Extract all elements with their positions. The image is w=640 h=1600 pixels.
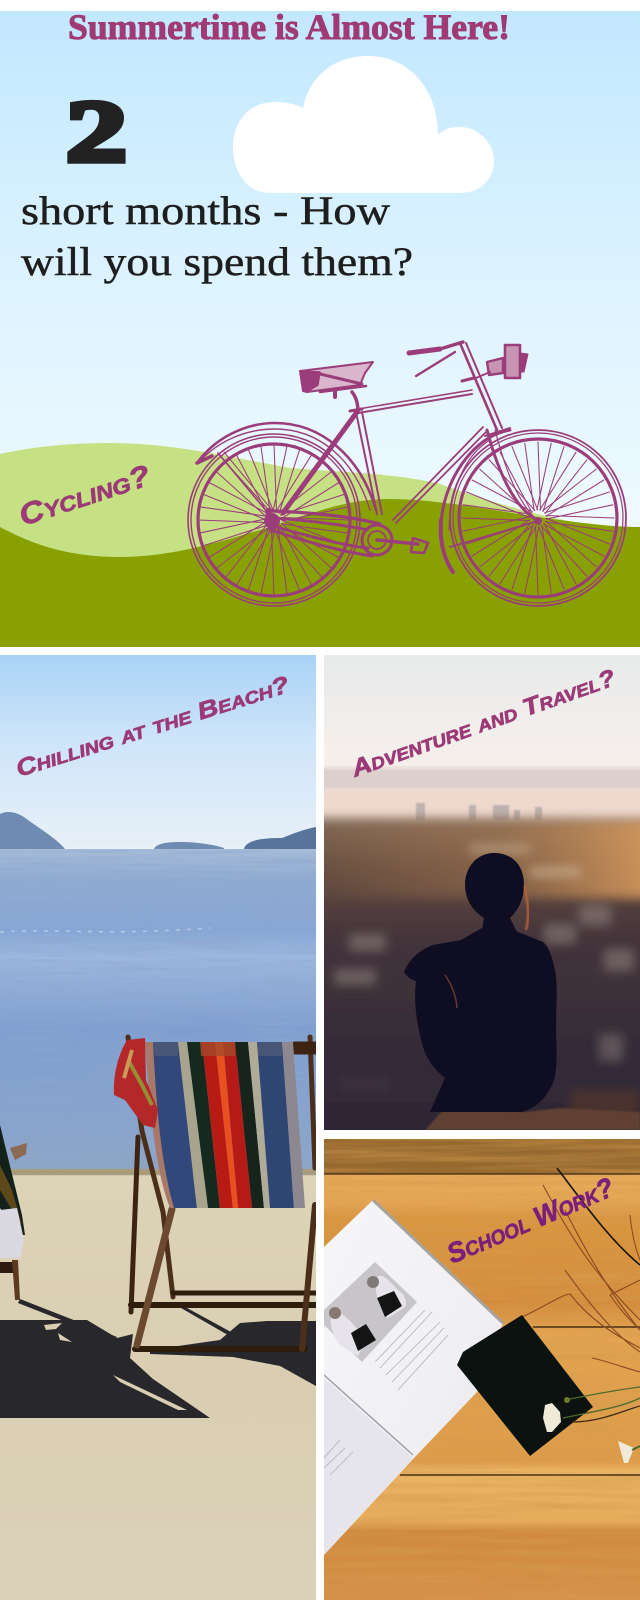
dark top plank	[324, 1139, 640, 1174]
handlebar	[409, 342, 463, 376]
left deck chair	[0, 1125, 27, 1300]
panel: hero sky and hills	[0, 7, 640, 647]
label: chilling at the beach: Chilling at the Beach?	[13, 671, 293, 783]
blurred city lights	[335, 845, 640, 1115]
portrait photos	[324, 1262, 417, 1362]
sky background	[0, 11, 640, 531]
subtitle line 2: will you spend them?	[21, 239, 413, 284]
beach sky	[0, 655, 316, 850]
label: school work: School Work?	[442, 1171, 618, 1270]
black notebook	[457, 1315, 593, 1456]
wet shoreline	[0, 1169, 316, 1175]
blurred city land	[290, 818, 640, 1158]
title: Summertime is Almost Here!	[68, 7, 510, 47]
plank lines	[324, 1174, 640, 1475]
twigs	[515, 1168, 640, 1372]
frame tubes	[283, 343, 537, 523]
towel on chair	[114, 1038, 158, 1128]
seated person silhouette	[404, 853, 557, 1112]
evening sky	[324, 655, 640, 768]
label: adventure and travel: Adventure and Travel?	[347, 664, 619, 783]
lamp	[476, 345, 528, 378]
distant islands	[0, 812, 316, 849]
rear mudguard	[197, 423, 376, 513]
light gaps in shadow	[44, 1323, 187, 1410]
subtitle line 1: short months - How	[21, 188, 390, 233]
big number 2: 2	[66, 84, 127, 181]
sea	[0, 849, 316, 1175]
illustration: bicycle	[188, 342, 626, 606]
panel: beach photo	[0, 655, 316, 1600]
cloud	[233, 56, 494, 193]
text lines	[322, 1310, 448, 1475]
chain case	[268, 511, 380, 556]
right deck chair	[114, 1037, 316, 1349]
striped canvas	[145, 1042, 305, 1208]
chair frame back	[128, 1037, 316, 1349]
wooden table	[324, 1139, 640, 1600]
book gutter	[324, 1375, 413, 1455]
head and hair	[465, 853, 524, 934]
light green hill	[0, 443, 573, 557]
open book	[322, 1200, 503, 1555]
arm highlight	[445, 975, 457, 1008]
distant skyline	[416, 803, 542, 820]
saddle	[300, 362, 373, 397]
front mudguard	[441, 430, 538, 572]
sun glints	[0, 928, 210, 932]
shadows on sand	[0, 1299, 316, 1418]
torso and arms	[404, 928, 557, 1112]
rim light on hair	[524, 885, 528, 930]
front wheel	[450, 430, 626, 606]
chainwheel and pedal	[362, 525, 428, 555]
flowers and stems	[543, 1387, 640, 1463]
book spine edge	[373, 1200, 503, 1323]
sand	[0, 1175, 316, 1600]
sea ripples	[79, 850, 316, 970]
label: cycling: Cycling?	[15, 459, 155, 533]
golden light	[290, 822, 640, 897]
pink horizon glow	[300, 790, 640, 822]
panel: desk photo	[322, 1139, 640, 1600]
wood grain	[324, 1139, 640, 1600]
haze band	[300, 768, 640, 790]
rock ledge	[425, 1108, 640, 1130]
lower page shade	[324, 1378, 413, 1555]
rear wheel	[188, 434, 360, 606]
dark green hill	[0, 499, 640, 647]
panel: travel photo	[324, 655, 640, 1130]
